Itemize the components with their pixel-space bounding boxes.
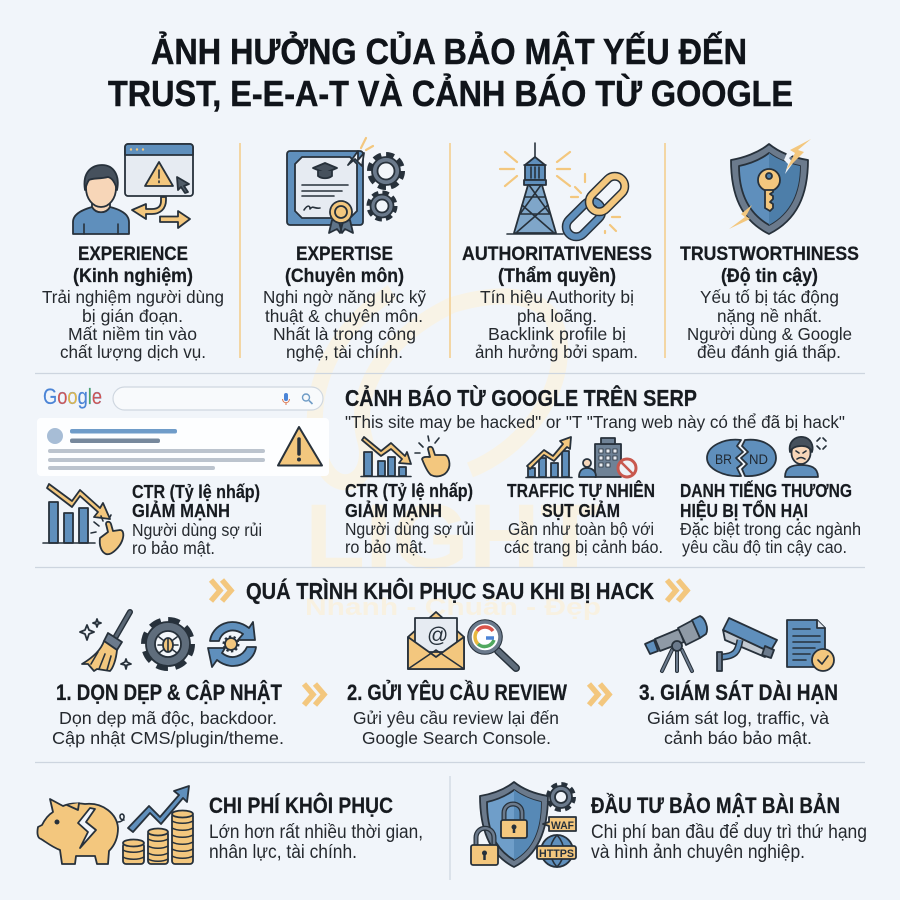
text block	[591, 822, 867, 863]
heading: 2. GỬI YÊU CẦU REVIEW	[347, 680, 567, 705]
icon: shield, locks, waf, https: WAF	[551, 820, 574, 832]
text block: nghệ, tài chính.	[286, 342, 403, 362]
heading	[285, 243, 404, 287]
text block: nhân lực, tài chính.	[209, 842, 357, 863]
text block: chất lượng dịch vụ.	[60, 342, 206, 362]
text block: Nghi ngờ năng lực kỹ	[263, 287, 426, 307]
text: ctr: ro bảo mật.	[132, 538, 215, 558]
title	[108, 30, 793, 114]
icon: shield, locks, waf, https: HTTPS	[539, 848, 574, 860]
text block: Người dùng & Google	[687, 324, 852, 344]
text: HIỆU BỊ TỔN HẠI	[680, 500, 808, 521]
watermark logo: Nhanh - Chuẩn - Đẹp	[305, 594, 601, 621]
step 3	[639, 616, 838, 748]
icon: rising chart, blocked building	[526, 437, 636, 478]
watermark logo: LIGHT	[305, 486, 600, 588]
arrow: step 2 to 3	[589, 684, 609, 705]
icon: envelope and google magnifier: @	[427, 624, 448, 647]
panel: google search mockup	[37, 384, 329, 558]
text block: nặng nề nhất.	[717, 306, 822, 326]
heading: (Thẩm quyền)	[498, 265, 616, 287]
heading	[680, 243, 859, 287]
heading: CẢNH BÁO TỪ GOOGLE TRÊN SERP	[345, 383, 697, 411]
heading: (Chuyên môn)	[285, 265, 404, 287]
title: ẢNH HƯỞNG CỦA BẢO MẬT YẾU ĐẾN	[151, 30, 747, 72]
heading	[462, 243, 652, 287]
panel: recovery cost	[37, 786, 423, 864]
heading: QUÁ TRÌNH KHÔI PHỤC SAU KHI BỊ HACK	[246, 577, 654, 604]
text block: bị gián đoạn.	[82, 306, 183, 326]
text block: cảnh báo bảo mật.	[664, 728, 812, 748]
text: Gần như toàn bộ với	[508, 519, 654, 539]
icon: broom, bug gear, refresh	[80, 612, 256, 671]
heading: EXPERTISE	[296, 243, 393, 265]
panel: authoritativeness	[462, 143, 652, 362]
text: DANH TIẾNG THƯƠNG	[680, 480, 852, 501]
icon: split brand and angry person	[707, 437, 826, 477]
text	[680, 480, 861, 557]
heading: (Kinh nghiệm)	[73, 265, 193, 287]
heading: ĐẦU TƯ BẢO MẬT BÀI BẢN	[591, 793, 840, 818]
text: các trang bị cảnh báo.	[504, 537, 663, 557]
step 2	[347, 612, 567, 748]
icon: broken piggy bank and coins	[37, 786, 193, 864]
panel: serp warning	[345, 383, 861, 557]
heading: 3. GIÁM SÁT DÀI HẠN	[639, 680, 838, 705]
text block: Chi phí ban đầu để duy trì thứ hạng	[591, 822, 867, 843]
text block: Giám sát log, traffic, và	[647, 708, 829, 728]
icon: tower and broken chain	[500, 143, 629, 241]
text block: và hình ảnh chuyên nghiệp.	[591, 842, 805, 863]
text block: Trải nghiệm người dùng	[42, 287, 224, 307]
icon: telescope, camera, report	[645, 616, 834, 671]
text block	[647, 708, 829, 748]
text: ctr: GIẢM MẠNH	[132, 500, 230, 521]
column: brand reputation	[680, 437, 861, 557]
chevrons right	[667, 580, 687, 601]
text block: đều đánh giá thấp.	[697, 342, 841, 362]
icon: falling bars and pointer	[361, 436, 449, 476]
text: ro bảo mật.	[345, 537, 427, 557]
icon: split brand and angry person: BR	[715, 451, 732, 467]
search bar	[113, 387, 323, 410]
heading: (Độ tin cậy)	[721, 265, 818, 287]
icon: shield, locks, waf, https	[471, 782, 576, 867]
text: CTR (Tỷ lệ nhấp)	[345, 480, 473, 501]
panel: expertise	[263, 138, 426, 362]
text: ctr	[132, 481, 262, 558]
heading: 1. DỌN DẸP & CẬP NHẬT	[56, 680, 282, 705]
text: yêu cầu độ tin cậy cao.	[682, 537, 847, 557]
text block	[209, 822, 423, 863]
text: ctr: CTR (Tỷ lệ nhấp)	[132, 481, 260, 502]
text block	[263, 287, 426, 362]
text: SỤT GIẢM	[542, 500, 620, 521]
warning quote: "This site may be hacked" or "T "Trang web này có thể đã bị hack"	[345, 412, 845, 432]
icon: envelope and google magnifier	[408, 612, 516, 669]
watermark logo	[305, 292, 601, 621]
text: Đặc biệt trong các ngành	[680, 519, 861, 539]
text block	[52, 708, 284, 748]
text block	[687, 287, 852, 362]
panel: security investment	[471, 782, 867, 867]
heading: CHI PHÍ KHÔI PHỤC	[209, 793, 393, 818]
text block: Yếu tố bị tác động	[700, 287, 839, 307]
panel: trustworthiness	[680, 139, 859, 362]
text: GIẢM MẠNH	[345, 500, 442, 521]
google logo: Google	[43, 384, 102, 409]
text block: ảnh hưởng bởi spam.	[475, 342, 638, 362]
text block: Backlink profile bị	[488, 324, 626, 344]
icon: damaged certificate and gears	[287, 138, 402, 233]
title: TRUST, E-E-A-T VÀ CẢNH BÁO TỪ GOOGLE	[108, 72, 793, 114]
column: ctr drop	[345, 436, 474, 557]
text block: Nhất là trong công	[273, 324, 416, 344]
icon: ctr falling	[43, 484, 123, 554]
step 1	[52, 612, 284, 748]
text: TRAFFIC TỰ NHIÊN	[507, 480, 655, 501]
icon: user facing interrupted site	[73, 144, 193, 234]
text block: Google Search Console.	[362, 728, 551, 748]
text block	[353, 708, 559, 748]
panel: recovery process	[52, 577, 838, 748]
search result card	[37, 418, 329, 476]
text block: Mất niềm tin vào	[68, 324, 197, 344]
text block: Lớn hơn rất nhiều thời gian,	[209, 822, 423, 843]
icon: split brand and angry person: ND	[749, 451, 768, 467]
text	[504, 480, 663, 557]
text block: pha loãng.	[517, 306, 597, 326]
text: Người dùng sợ rủi	[345, 519, 474, 539]
text block: Cập nhật CMS/plugin/theme.	[52, 728, 284, 748]
text block: Dọn dẹp mã độc, backdoor.	[59, 708, 277, 728]
text	[345, 480, 474, 557]
text block: Gửi yêu cầu review lại đến	[353, 708, 559, 728]
panel: experience	[42, 144, 224, 362]
text block	[475, 287, 638, 362]
icon: cracked shield with key	[729, 139, 811, 234]
heading: TRUSTWORTHINESS	[680, 243, 859, 265]
heading: EXPERIENCE	[78, 243, 188, 265]
chevrons left	[211, 580, 231, 601]
text block: thuật & chuyên môn.	[265, 306, 423, 326]
text: ctr: Người dùng sợ rủi	[132, 520, 262, 540]
column: organic traffic drop	[504, 437, 663, 557]
text block	[42, 287, 224, 362]
arrow: step 1 to 2	[304, 684, 324, 705]
heading: AUTHORITATIVENESS	[462, 243, 652, 265]
heading	[73, 243, 193, 287]
text block: Tín hiệu Authority bị	[480, 287, 634, 307]
